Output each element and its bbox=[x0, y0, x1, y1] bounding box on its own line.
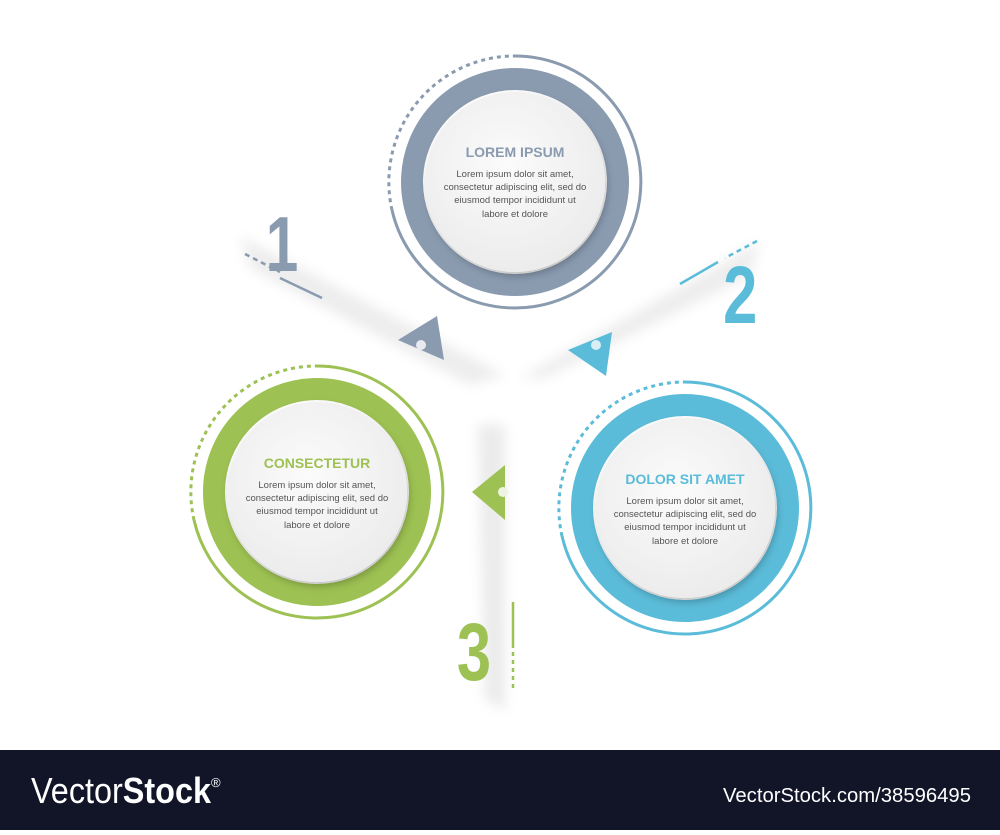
number 3 bbox=[457, 602, 513, 698]
circle 3: Dolor sit amet: eiusmod tempor incididunt ut bbox=[624, 522, 746, 533]
circle 1: Lorem ipsum: labore et dolore bbox=[482, 209, 548, 220]
circle 2: Consectetur: eiusmod tempor incididunt ut bbox=[256, 506, 378, 517]
circle 2: Consectetur: labore et dolore bbox=[284, 520, 350, 531]
circle 2: Consectetur: CONSECTETUR bbox=[264, 455, 370, 471]
number 2: 2 bbox=[723, 249, 757, 341]
circle 3: Dolor sit amet: labore et dolore bbox=[652, 536, 718, 547]
footer bar bbox=[0, 750, 1000, 830]
circle 3: Dolor sit amet bbox=[559, 382, 811, 634]
circle 1: Lorem ipsum: eiusmod tempor incididunt ut bbox=[454, 195, 576, 206]
triangle: green bbox=[472, 465, 508, 520]
circle 2: Consectetur: Lorem ipsum dolor sit amet, bbox=[258, 480, 376, 491]
number 1: 1 bbox=[266, 201, 298, 288]
number 2 bbox=[680, 241, 757, 341]
circle 3: Dolor sit amet: Lorem ipsum dolor sit amet, bbox=[626, 496, 744, 507]
circle 1: Lorem ipsum: consectetur adipiscing elit, sed do bbox=[444, 182, 586, 193]
fold shadows bbox=[240, 236, 760, 710]
footer bar: ® bbox=[211, 775, 221, 790]
circle 3: Dolor sit amet: DOLOR SIT AMET bbox=[625, 471, 745, 487]
triangle: gray bbox=[398, 316, 444, 360]
number 3: 3 bbox=[457, 606, 491, 698]
footer bar: VectorStock.com/38596495 bbox=[723, 785, 971, 807]
circle 2: Consectetur: consectetur adipiscing elit, sed do bbox=[246, 493, 388, 504]
circle 1: Lorem ipsum: Lorem ipsum dolor sit amet, bbox=[456, 169, 574, 180]
circle 2: Consectetur bbox=[191, 366, 443, 618]
circle 1: Lorem ipsum: LOREM IPSUM bbox=[466, 144, 564, 160]
circle 1: Lorem ipsum bbox=[389, 56, 641, 308]
number 1 bbox=[245, 201, 322, 298]
triangle: blue bbox=[568, 332, 612, 376]
footer bar: VectorStock bbox=[31, 770, 212, 811]
circle 3: Dolor sit amet: consectetur adipiscing elit, sed do bbox=[614, 509, 756, 520]
